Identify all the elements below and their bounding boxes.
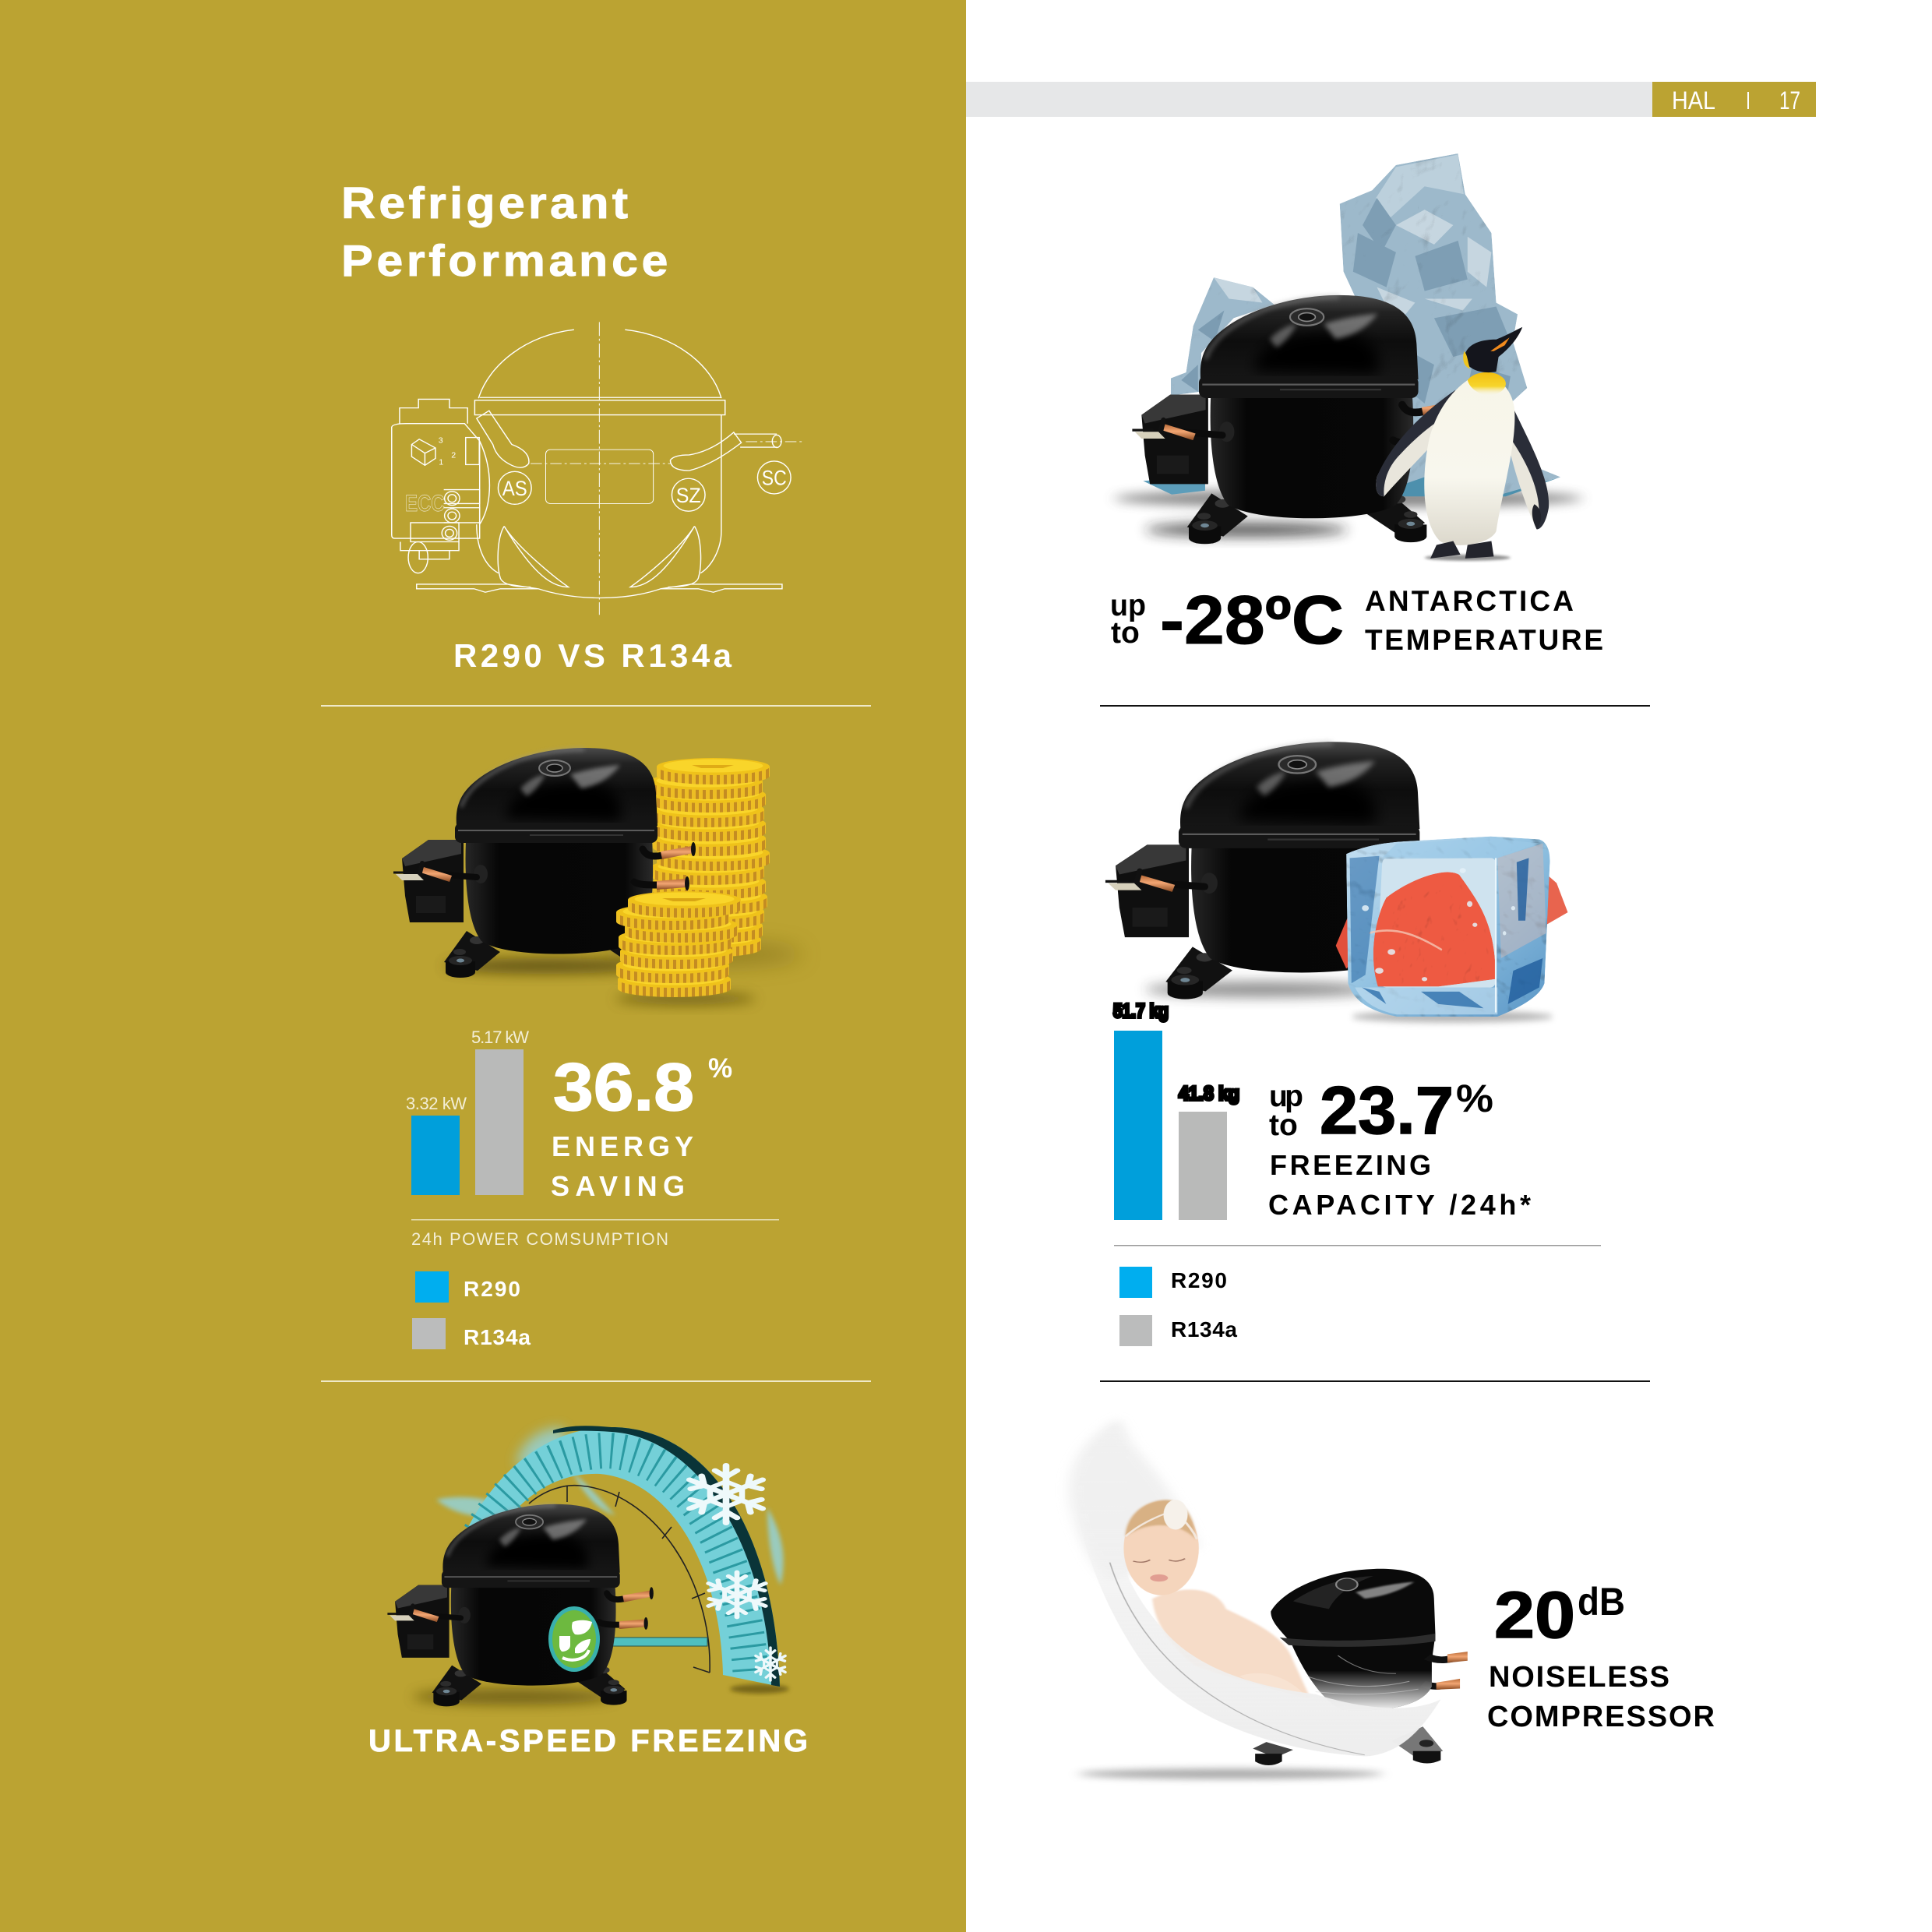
bar chart: freezing capacity: 51.7 kg — [1113, 1000, 1169, 1022]
stat: up to 23.7 percent freezing capacity: to — [1269, 1109, 1298, 1142]
feather fuzz — [1069, 1418, 1199, 1583]
blueprint letter labels — [405, 437, 787, 516]
stat: up to 23.7 percent freezing capacity — [1268, 1074, 1531, 1221]
dial arc with ticks — [529, 1486, 710, 1673]
stat: up to -28C Antarctica temperature: TEMPERATURE — [1365, 624, 1603, 656]
divider: lower right — [1100, 1380, 1650, 1382]
page tag: 17 — [1779, 86, 1800, 115]
stat: 20 dB noiseless compressor — [1487, 1578, 1715, 1733]
blueprint letter labels: SZ — [676, 484, 701, 507]
legend: right panel — [1119, 1267, 1237, 1346]
bar chart: power consumption: 3.32 kW — [406, 1094, 467, 1113]
legend: right panel: R290 — [1171, 1268, 1227, 1292]
penguin — [1376, 327, 1549, 561]
diagram: compressor blueprint line drawing — [392, 322, 802, 615]
stat: up to 23.7 percent freezing capacity: % — [1456, 1077, 1493, 1120]
legend: left panel: R290 — [464, 1277, 520, 1301]
compressor feet — [1253, 1726, 1443, 1765]
badge: green plug and leaves — [548, 1606, 600, 1672]
panel: gold left column — [0, 0, 966, 1932]
bar chart: freezing capacity — [1113, 1000, 1239, 1220]
legend: left panel — [412, 1271, 531, 1349]
compressor — [387, 1504, 654, 1706]
stat: up to 23.7 percent freezing capacity: FREEZING — [1270, 1149, 1431, 1181]
legend: right panel: R134a — [1171, 1317, 1237, 1341]
stat: 20 dB noiseless compressor: NOISELESS — [1489, 1661, 1669, 1694]
glow wisps — [436, 1427, 784, 1585]
stat: 20 dB noiseless compressor: COMPRESSOR — [1487, 1701, 1715, 1733]
label: R290 VS R134a: R290 VS R134a — [453, 637, 732, 674]
caption: 24h power consumption: 24h POWER COMSUMPTION — [411, 1229, 668, 1249]
bar chart: power consumption — [406, 1028, 529, 1195]
stat: 36.8 percent energy saving: SAVING — [551, 1170, 685, 1202]
stat: up to -28C Antarctica temperature: to — [1111, 616, 1140, 650]
stat: up to -28C Antarctica temperature: ANTARCTICA — [1365, 585, 1574, 617]
heading: Refrigerant Performance — [341, 178, 668, 286]
blueprint letter labels: 1 — [439, 459, 444, 467]
divider: chart base — [1114, 1245, 1601, 1246]
bar chart: freezing capacity: 41.8 kg — [1179, 1083, 1239, 1105]
illustration: compressor and frozen meat in ice — [1105, 742, 1567, 1022]
blueprint letter labels: ECC — [405, 490, 445, 516]
stat: up to -28C Antarctica temperature: up — [1110, 589, 1146, 622]
illustration: ultra-speed freezing gauge — [387, 1426, 789, 1706]
iceberg large — [1340, 153, 1560, 495]
feather — [1077, 1419, 1440, 1756]
blueprint letter labels: 2 — [451, 452, 457, 460]
stat: 36.8 percent energy saving: 36.8 — [553, 1050, 694, 1125]
illustration: compressor, iceberg and penguin — [1115, 153, 1582, 561]
compressor — [1132, 295, 1460, 544]
stat: 20 dB noiseless compressor: dB — [1578, 1580, 1625, 1624]
illustration: compressor with coin stacks — [393, 748, 802, 1005]
heading: Refrigerant Performance: Performance — [341, 236, 668, 286]
blueprint letter labels: SC — [762, 467, 787, 489]
stat: up to -28C Antarctica temperature — [1110, 581, 1603, 658]
blueprint letter labels: 3 — [439, 437, 443, 445]
ice cube — [1336, 837, 1567, 1022]
page tag: HAL — [1672, 86, 1715, 115]
snowflakes — [684, 1465, 788, 1680]
header bar — [966, 82, 1816, 117]
bar chart: power consumption: 5.17 kW — [471, 1028, 529, 1047]
compressor — [393, 748, 696, 978]
compressor body — [1271, 1569, 1468, 1710]
divider: lower left — [321, 1380, 871, 1382]
pointer — [601, 1638, 707, 1646]
iceberg small — [1171, 277, 1274, 396]
blueprint letter labels: AS — [502, 477, 527, 500]
stat: 36.8 percent energy saving — [551, 1050, 732, 1202]
stat: up to -28C Antarctica temperature: -28ºC — [1160, 581, 1344, 658]
divider: top left — [321, 705, 871, 707]
small coin stack — [616, 891, 741, 997]
label: ultra-speed freezing: ULTRA-SPEED FREEZING — [368, 1724, 808, 1758]
divider: top right — [1100, 705, 1650, 707]
stat: up to 23.7 percent freezing capacity: up — [1269, 1080, 1303, 1113]
stat: 20 dB noiseless compressor: 20 — [1494, 1578, 1575, 1652]
legend: left panel: R134a — [464, 1325, 531, 1349]
stat: 36.8 percent energy saving: % — [708, 1053, 732, 1084]
heading: Refrigerant Performance: Refrigerant — [341, 178, 628, 228]
stat: up to 23.7 percent freezing capacity: 23.7 — [1320, 1074, 1454, 1148]
baby — [1123, 1500, 1311, 1699]
large coin stack — [648, 758, 770, 957]
illustration: baby on feather with compressor — [1069, 1418, 1468, 1779]
stat: up to 23.7 percent freezing capacity: CAPACITY /24h* — [1268, 1189, 1531, 1221]
page tag — [1652, 82, 1816, 117]
divider: chart base — [411, 1219, 779, 1220]
stat: 36.8 percent energy saving: ENERGY — [552, 1130, 693, 1162]
